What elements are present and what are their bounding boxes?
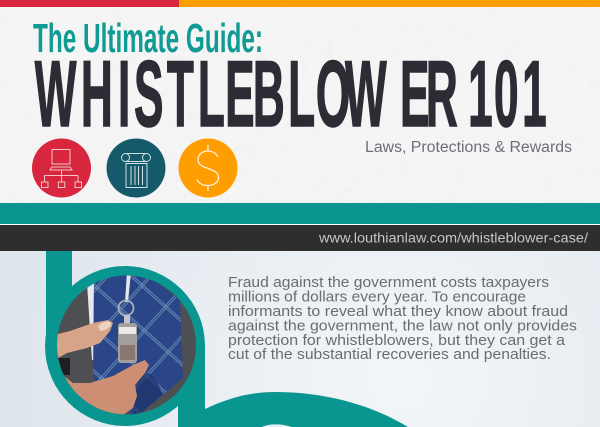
lower hand and thumb: [60, 360, 149, 416]
lanyard: [125, 276, 131, 302]
intro paragraph: millions of dollars every year. To encourage: [228, 290, 526, 306]
icon: dollar sign: [178, 138, 238, 198]
title: The Ultimate Guide: The Ultimate Guide:: [33, 15, 263, 61]
title: Whistleblower 101: WHISTLEBLOWER 101: [35, 42, 547, 146]
intro paragraph: against the government, the law not only provides: [228, 318, 577, 334]
thumbnail: [98, 322, 111, 331]
shirt strip: [87, 281, 95, 360]
photo: hand holding a whistle: [57, 276, 196, 414]
website url: www.louthianlaw.com/whistleblower-case/: [318, 230, 588, 246]
upper fingers: [54, 320, 113, 360]
intro paragraph: protection for whistleblowers, but they can get a: [228, 333, 566, 349]
teal connector shape: [45, 251, 408, 427]
teal band: [0, 203, 600, 224]
intro paragraph: informants to reveal what they know about fraud: [228, 304, 568, 320]
subtitle: Laws, Protections & Rewards: [365, 139, 572, 156]
dark shadow under hand: [58, 358, 70, 375]
intro paragraph: cut of the substantial recoveries and penalties.: [228, 347, 551, 363]
intro paragraph: [228, 275, 577, 363]
intro section background: [0, 251, 600, 427]
necktie: [93, 272, 183, 418]
curved band inner edge: [262, 424, 292, 427]
intro paragraph: Fraud against the government costs taxpayers: [228, 275, 549, 291]
tie shadow: [132, 372, 162, 414]
top colour bar: [0, 0, 600, 7]
icon: greek column: [106, 138, 166, 198]
header background: [0, 7, 600, 203]
whistle: [118, 300, 137, 363]
dark url band: [0, 225, 600, 251]
icon: computer network: [32, 138, 91, 198]
